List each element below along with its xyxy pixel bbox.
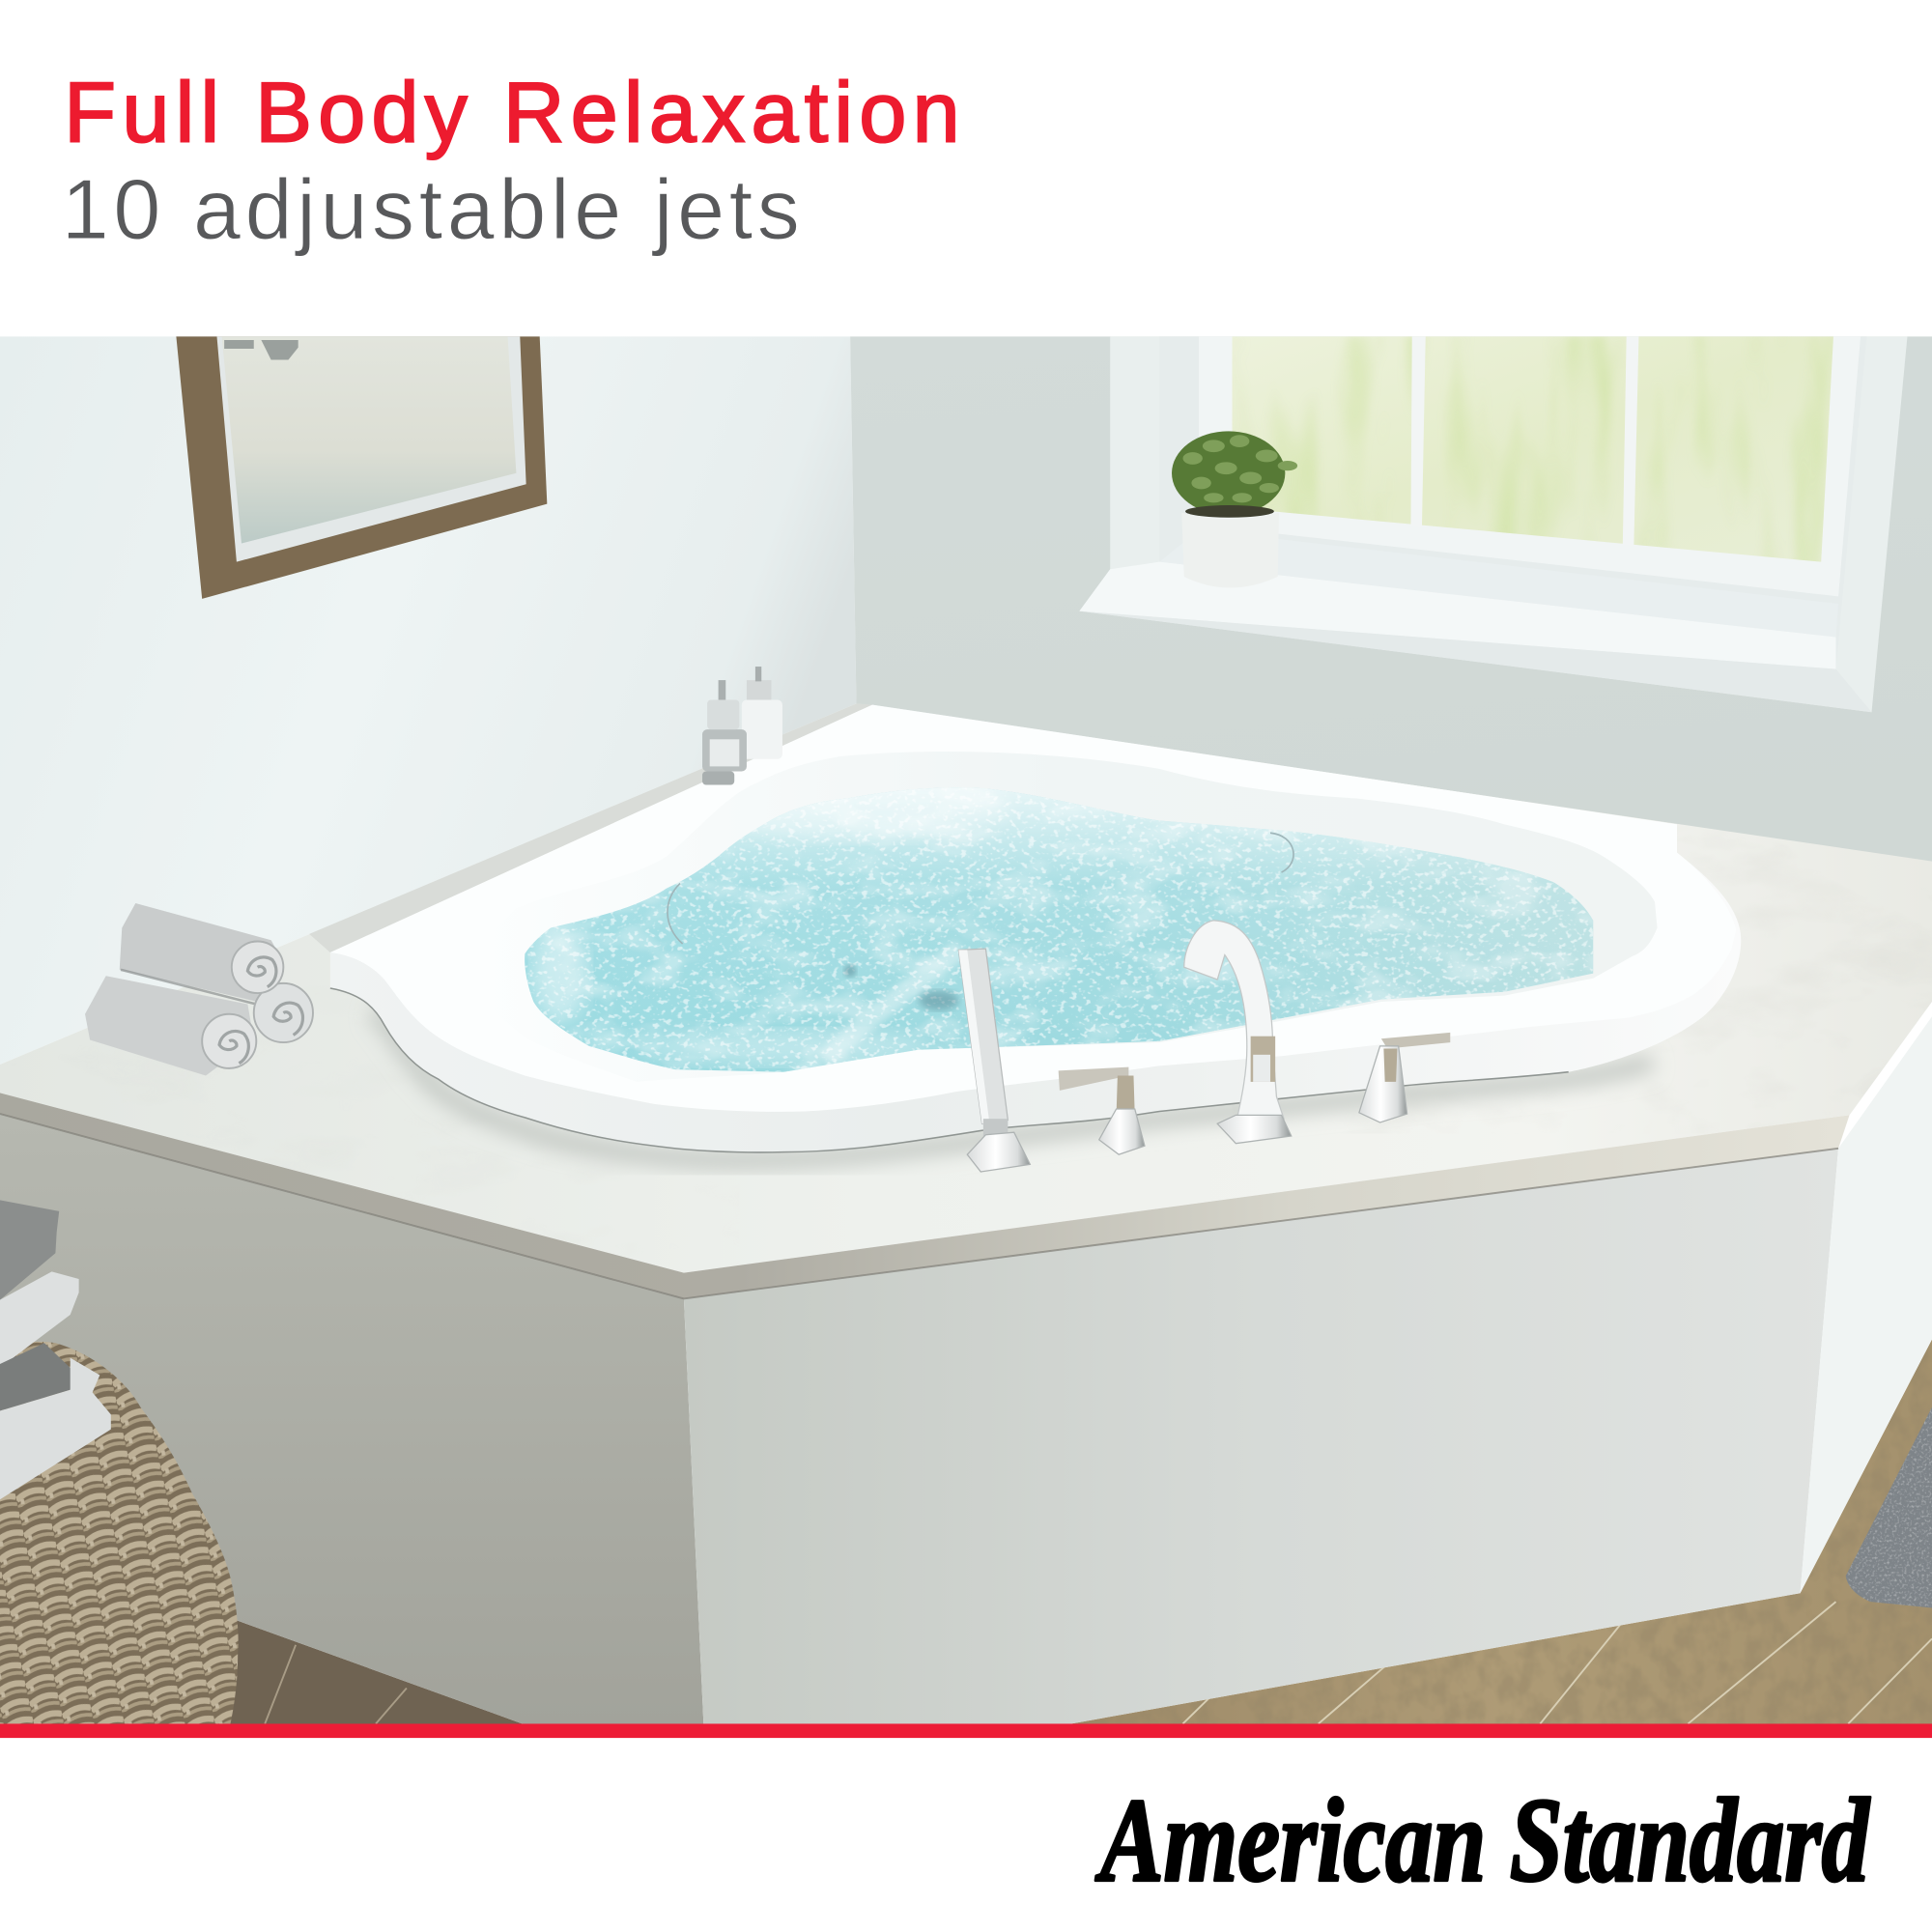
rolled towels (85, 903, 313, 1076)
heading block (62, 65, 960, 257)
apron: front face (684, 1149, 1838, 1723)
tub base line (330, 988, 1569, 1152)
floor left (222, 1620, 523, 1723)
apron: right face (1801, 1016, 1932, 1593)
marble deck (0, 703, 1932, 1273)
bath mat (1842, 1405, 1932, 1614)
right wall (850, 336, 1932, 887)
lip shadow line (0, 1114, 1838, 1298)
left handle (1059, 1067, 1145, 1154)
tub side wall (330, 774, 1741, 1151)
floor right (1070, 1339, 1932, 1723)
soap bottles (702, 667, 782, 784)
apron: left face (0, 1114, 703, 1723)
window with sill (1079, 336, 1907, 712)
spout faucet (1184, 921, 1292, 1144)
deck front lip (0, 1093, 1850, 1298)
framed picture (176, 336, 547, 599)
tub top rim (330, 705, 1493, 1112)
red divider bar (0, 1723, 1932, 1738)
right handle (1359, 1033, 1450, 1122)
potted plant (1172, 431, 1297, 587)
subtitle: 10 adjustable jets (62, 161, 800, 257)
photo: corner whirlpool bathtub scene (0, 336, 1932, 1723)
bath pillows (668, 833, 1293, 944)
hand shower (958, 949, 1030, 1172)
tub bowl (867, 752, 1658, 1047)
title: Full Body Relaxation (64, 65, 960, 160)
wicker basket (0, 1342, 239, 1723)
water with jet foam (518, 775, 1602, 1078)
tub shadow on deck (373, 1010, 1652, 1160)
left wall (0, 336, 856, 1065)
folded towels (0, 1200, 111, 1499)
